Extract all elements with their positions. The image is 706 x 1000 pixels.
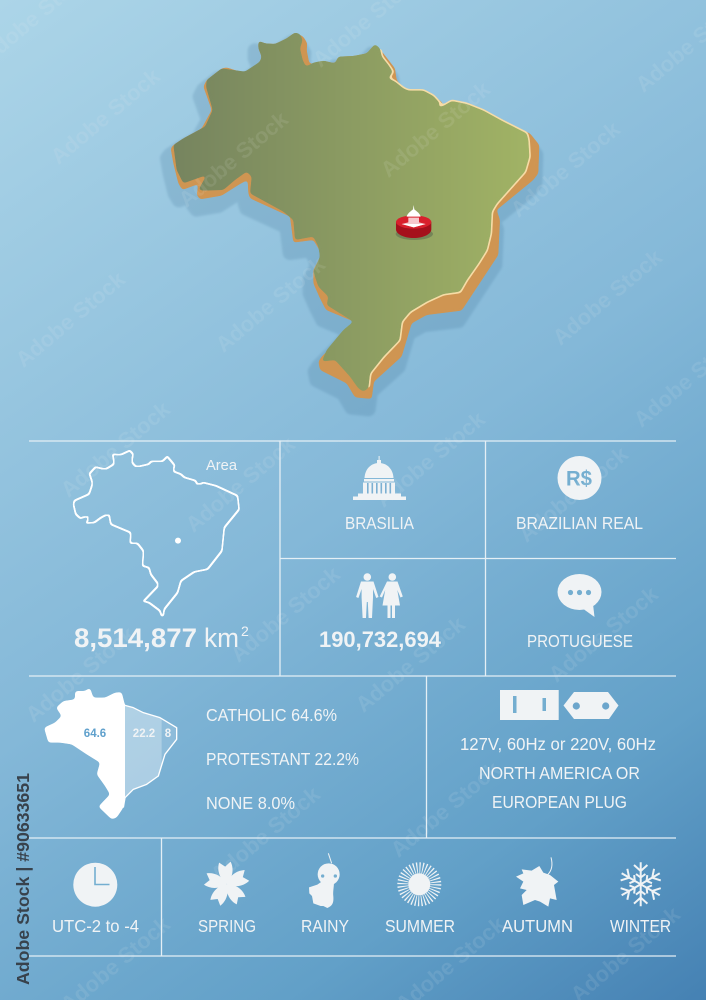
map side wall [171,32,539,399]
stock watermarks: Adobe Stock [21,621,140,727]
map top surface [173,32,529,392]
summer label: SUMMER [385,916,455,936]
outline map [73,449,240,617]
stock watermarks: Adobe Stock [371,406,490,512]
protestant share: PROTESTANT 22.2% [206,749,359,769]
religion map value: protestant: 22.2 [133,728,155,740]
stock watermarks: Adobe Stock [226,561,345,667]
panel: population [319,573,442,652]
winter label: WINTER [610,916,671,936]
stock watermarks: Adobe Stock [351,611,470,717]
icon: autumn leaf [516,857,558,907]
main 3D map of Brazil [167,32,539,409]
spring label: SPRING [198,916,256,936]
stock watermarks: Adobe Stock [386,756,505,862]
panel: seasons [198,853,671,936]
stock watermarks: Adobe Stock [506,116,625,222]
icon: summer sun [403,868,436,901]
language label: PROTUGUESE [527,631,633,651]
icon: rain doll [309,853,340,908]
voltage text: 127V, 60Hz or 220V, 60Hz [460,734,656,754]
stock watermarks: Adobe Stock [206,781,325,887]
timezone label: UTC-2 to -4 [52,916,139,936]
map coast highlight [368,48,529,388]
stock watermarks: Adobe Stock [181,431,300,537]
stock watermarks: Adobe Stock [46,63,165,169]
icon: people [356,573,403,618]
religion map [44,688,177,819]
area label: Area [206,457,238,474]
stock image ID: Adobe Stock | #90633651 [13,773,33,985]
stock watermarks: Adobe Stock [211,251,330,357]
stock watermarks: Adobe Stock [544,581,663,687]
catholic share: CATHOLIC 64.6% [206,705,337,725]
coin symbol: R$ [566,468,592,490]
autumn label: AUTUMN [502,916,573,936]
icon: speech bubble [558,574,602,617]
stock watermarks: Adobe Stock [548,244,667,350]
religion map value: catholic: 64.6 [84,728,106,740]
plug text line 1: NORTH AMERICA OR [479,763,640,783]
grid lines [29,441,676,956]
stock watermarks: Adobe Stock [514,441,633,547]
panel: electricity [460,690,656,812]
panel: religion [44,688,359,819]
icon: spring flower [204,861,250,906]
currency label: BRAZILIAN REAL [516,513,643,533]
panel: language [527,574,633,651]
area value: 8,514,877 [74,623,197,653]
religion map value: none: 8 [165,728,172,740]
stock watermarks: Adobe Stock [56,396,175,502]
icon: capitol building [353,456,406,500]
capital marker [396,205,433,240]
area exponent: 2 [241,623,249,639]
icon: european plug [564,692,618,719]
population value: 190,732,694 [319,627,442,652]
panel: capital [345,456,414,533]
icon: north american plug [500,690,559,720]
panel: timezone [52,863,139,936]
panel: area [73,449,249,653]
no religion share: NONE 8.0% [206,793,295,813]
icon: winter snowflake [618,862,663,906]
stock watermarks: Adobe Stock [174,106,293,212]
stock watermarks: Adobe Stock [11,266,130,372]
icon: clock [73,863,117,907]
icon: coin [558,456,602,500]
plug text line 2: EUROPEAN PLUG [492,792,627,812]
stock watermarks: Adobe Stock [376,76,495,182]
map shadow [167,42,536,409]
rainy label: RAINY [301,916,349,936]
capital label: BRASILIA [345,513,414,533]
area unit: km [204,623,239,653]
panel: currency [516,456,643,533]
